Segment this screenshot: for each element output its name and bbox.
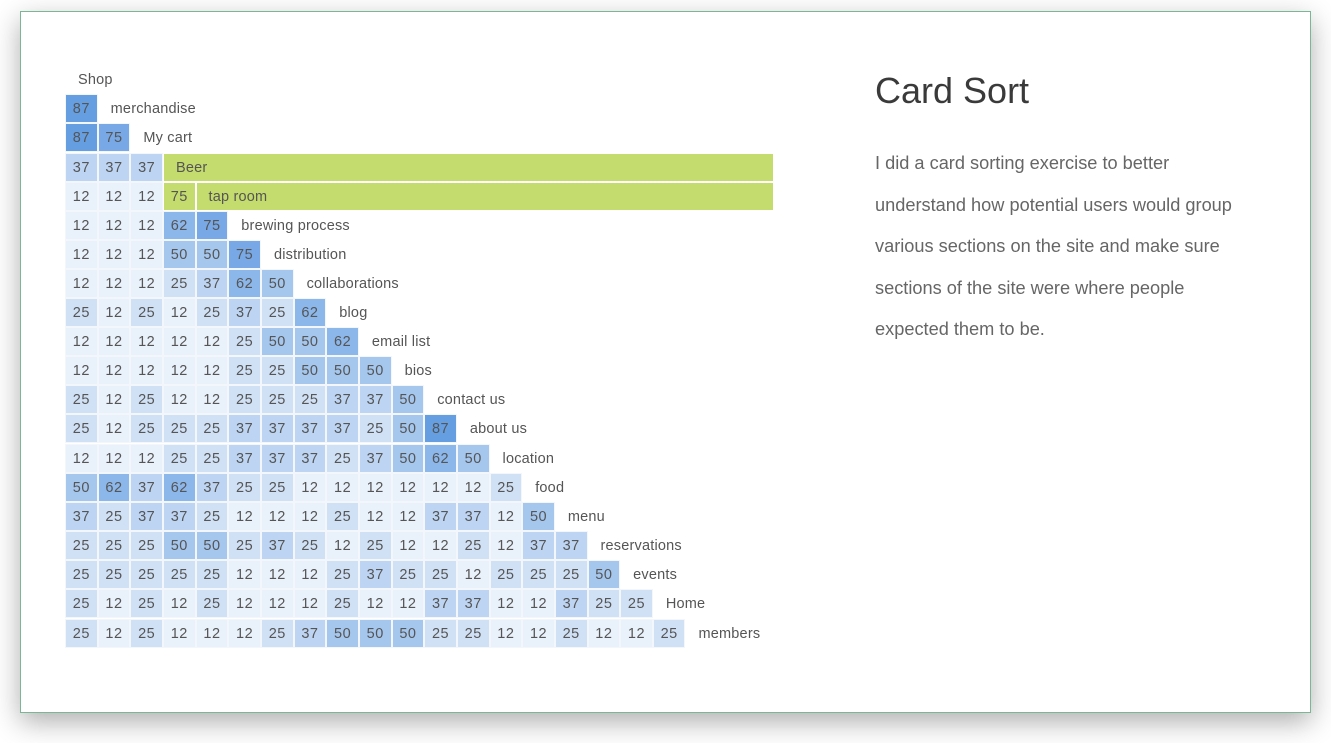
row: about us: 37 — [334, 421, 351, 437]
row: members: 12 — [105, 626, 123, 642]
row: reservations: 25 — [236, 538, 253, 554]
row: events: 12 — [301, 567, 318, 583]
row: members: 12 — [497, 626, 514, 642]
row: reservations: 12 — [497, 538, 514, 554]
row: menu: 12 — [236, 509, 253, 525]
row: contact us: contact us — [437, 392, 505, 408]
row: events: 25 — [203, 567, 221, 583]
row: reservations: 50 — [203, 538, 221, 554]
row: email list: 12 — [138, 334, 155, 350]
row: food: 12 — [301, 480, 318, 496]
row: blog: blog — [339, 305, 367, 321]
row: blog: 25 — [203, 305, 221, 321]
row: food: 25 — [236, 480, 253, 496]
row: reservations: 37 — [269, 538, 286, 554]
row: menu: 37 — [432, 509, 449, 525]
row: reservations: 25 — [367, 538, 384, 554]
row: contact us: 25 — [138, 392, 155, 408]
row: menu: 25 — [334, 509, 351, 525]
row: about us: 25 — [203, 421, 221, 437]
row: distribution: distribution — [274, 247, 346, 263]
row: contact us: 37 — [367, 392, 384, 408]
row: menu: 37 — [465, 509, 482, 525]
row: menu: 25 — [105, 509, 123, 525]
row: food: 12 — [465, 480, 482, 496]
row: reservations: 37 — [563, 538, 580, 554]
row: Home: 37 — [465, 596, 482, 612]
row: location — [65, 444, 554, 473]
row: events: 12 — [236, 567, 253, 583]
row: collaborations: 12 — [73, 276, 90, 292]
row: events: 50 — [595, 567, 612, 583]
row: members: 50 — [367, 626, 384, 642]
row: reservations: 25 — [105, 538, 123, 554]
row: events: 25 — [432, 567, 449, 583]
row: Home: 25 — [203, 596, 221, 612]
row: about us: 25 — [138, 421, 155, 437]
row: contact us: 12 — [203, 392, 221, 408]
row: members: 12 — [628, 626, 645, 642]
row: Home: 37 — [432, 596, 449, 612]
row: bios: 12 — [73, 363, 90, 379]
row: bios: 50 — [367, 363, 384, 379]
row: tap room: 75 — [171, 188, 188, 204]
row: members: 25 — [661, 626, 678, 642]
row: events: 25 — [497, 567, 514, 583]
chart: card sort similarity matrix: tap room — [208, 188, 267, 204]
row: location: 37 — [236, 451, 253, 467]
row: bios: bios — [405, 363, 432, 379]
row: about us: 25 — [171, 421, 188, 437]
row: email list: 62 — [334, 334, 351, 350]
row: contact us: 25 — [301, 392, 318, 408]
row: food: 37 — [203, 480, 221, 496]
row: about us: 37 — [269, 421, 286, 437]
row: brewing process: 12 — [105, 218, 123, 234]
row: members: 25 — [465, 626, 482, 642]
row: Home: 12 — [236, 596, 253, 612]
row: collaborations: collaborations — [307, 276, 399, 292]
row: bios — [65, 356, 432, 385]
row: merchandise: 87 — [73, 101, 90, 117]
row: members: 25 — [73, 626, 90, 642]
row: collaborations — [65, 269, 399, 298]
row: events — [65, 560, 677, 589]
row: location: 25 — [203, 451, 221, 467]
row: blog — [65, 298, 367, 327]
row: events: 25 — [138, 567, 155, 583]
row: reservations: 12 — [399, 538, 416, 554]
row: members: members — [698, 626, 760, 642]
row: distribution: 12 — [73, 247, 90, 263]
row: email list: 50 — [301, 334, 318, 350]
row: menu: 50 — [530, 509, 547, 525]
row: location: 50 — [465, 451, 482, 467]
row: bios: 25 — [269, 363, 286, 379]
row: events: 25 — [334, 567, 351, 583]
chart: card sort similarity matrix: Beer — [176, 160, 207, 176]
row: contact us: 25 — [73, 392, 90, 408]
row: blog: 37 — [236, 305, 253, 321]
row: reservations: 12 — [432, 538, 449, 554]
row: about us: 87 — [432, 421, 449, 437]
row: location: 25 — [334, 451, 351, 467]
row: reservations: 37 — [530, 538, 547, 554]
row: bios: 12 — [138, 363, 155, 379]
row: events: 25 — [105, 567, 123, 583]
text block: description: various sections on the site and make sure — [875, 236, 1220, 256]
row: email list: 25 — [236, 334, 253, 350]
row: menu: 37 — [138, 509, 155, 525]
row: collaborations: 37 — [203, 276, 221, 292]
label: Shop: Shop — [78, 72, 113, 88]
row: reservations: reservations — [600, 538, 682, 554]
row: bios: 12 — [203, 363, 221, 379]
row: members: 37 — [301, 626, 318, 642]
row: food — [65, 473, 564, 502]
row: My cart: 75 — [105, 130, 123, 146]
row: brewing process: brewing process — [241, 218, 350, 234]
row: location: 37 — [269, 451, 286, 467]
row: events: 25 — [530, 567, 547, 583]
row: Home: 12 — [301, 596, 318, 612]
row: merchandise — [65, 94, 196, 123]
row: blog: 62 — [301, 305, 318, 321]
text block: description: understand how potential users would group — [875, 194, 1232, 214]
row: collaborations: 62 — [236, 276, 253, 292]
row: contact us: 37 — [334, 392, 351, 408]
row: events: 25 — [171, 567, 188, 583]
row: Beer — [65, 153, 773, 182]
row: Beer: 37 — [73, 160, 90, 176]
row: food: 12 — [432, 480, 449, 496]
row: location: location — [503, 451, 554, 467]
row: email list: 12 — [171, 334, 188, 350]
row: reservations — [65, 531, 682, 560]
row: food: food — [535, 480, 564, 496]
row: Home: 12 — [269, 596, 286, 612]
row: distribution: 12 — [138, 247, 155, 263]
row: about us: 25 — [367, 421, 384, 437]
row: brewing process: 75 — [203, 218, 221, 234]
row: menu: 12 — [367, 509, 384, 525]
row: email list: 12 — [73, 334, 90, 350]
row: Home: 12 — [399, 596, 416, 612]
row: distribution: 50 — [203, 247, 221, 263]
row: about us: 50 — [399, 421, 416, 437]
row: reservations: 25 — [73, 538, 90, 554]
row: location: 12 — [73, 451, 90, 467]
row: Home: 12 — [105, 596, 123, 612]
row: food: 50 — [73, 480, 90, 496]
row: collaborations: 50 — [269, 276, 286, 292]
row: distribution: 50 — [171, 247, 188, 263]
row: members: 25 — [138, 626, 155, 642]
text block: description: expected them to be. — [875, 319, 1045, 339]
row: distribution: 75 — [236, 247, 253, 263]
row: blog: 12 — [105, 305, 123, 321]
row: Home: 12 — [171, 596, 188, 612]
row: members: 12 — [530, 626, 547, 642]
row: blog: 25 — [73, 305, 90, 321]
row: reservations: 25 — [465, 538, 482, 554]
row: blog: 12 — [171, 305, 188, 321]
row: food: 12 — [367, 480, 384, 496]
row: blog: 25 — [269, 305, 286, 321]
row: Home: 37 — [563, 596, 580, 612]
row: bios: 12 — [105, 363, 123, 379]
row: distribution: 12 — [105, 247, 123, 263]
row: food: 12 — [399, 480, 416, 496]
row: Home: 25 — [628, 596, 645, 612]
row: menu: menu — [568, 509, 605, 525]
row: Home: 25 — [595, 596, 612, 612]
row: Beer: 37 — [138, 160, 155, 176]
row: menu: 37 — [171, 509, 188, 525]
row: members: 50 — [334, 626, 351, 642]
row: Beer: 37 — [105, 160, 123, 176]
row: food: 12 — [334, 480, 351, 496]
text block: description — [875, 153, 1232, 339]
row: events: 25 — [563, 567, 580, 583]
row: bios: 50 — [301, 363, 318, 379]
row: members: 12 — [236, 626, 253, 642]
row: about us — [65, 414, 527, 443]
row: blog: 25 — [138, 305, 155, 321]
row: events: 25 — [399, 567, 416, 583]
row: events: 12 — [465, 567, 482, 583]
row: menu: 12 — [399, 509, 416, 525]
row: members: 25 — [269, 626, 286, 642]
row: events: 25 — [73, 567, 90, 583]
row: members: 25 — [563, 626, 580, 642]
text block: description: I did a card sorting exercise to better — [875, 153, 1169, 173]
row: members: 50 — [399, 626, 416, 642]
row: Home: 25 — [138, 596, 155, 612]
row: location: 62 — [432, 451, 449, 467]
text block: description: sections of the site were where people — [875, 278, 1184, 298]
row: bios: 50 — [334, 363, 351, 379]
row: Home: 12 — [367, 596, 384, 612]
row: location: 37 — [301, 451, 318, 467]
row: food: 37 — [138, 480, 155, 496]
row: tap room: 12 — [105, 188, 123, 204]
row: about us: 12 — [105, 421, 123, 437]
row: location: 37 — [367, 451, 384, 467]
row: contact us: 25 — [269, 392, 286, 408]
row: distribution — [65, 240, 346, 269]
row: menu: 12 — [269, 509, 286, 525]
row: brewing process — [65, 211, 350, 240]
row: members: 25 — [432, 626, 449, 642]
row: Home: 25 — [73, 596, 90, 612]
row: Home: 12 — [497, 596, 514, 612]
row: location: 12 — [138, 451, 155, 467]
row: merchandise: merchandise — [111, 101, 196, 117]
row: location: 25 — [171, 451, 188, 467]
row: Home: Home — [666, 596, 705, 612]
row: contact us: 25 — [236, 392, 253, 408]
row: email list: 12 — [203, 334, 221, 350]
row: contact us: 50 — [399, 392, 416, 408]
row: food: 62 — [105, 480, 123, 496]
row: tap room — [65, 182, 773, 211]
row: about us: 37 — [236, 421, 253, 437]
row: about us: 37 — [301, 421, 318, 437]
row: My cart: My cart — [143, 130, 192, 146]
row: menu — [65, 502, 605, 531]
row: food: 25 — [269, 480, 286, 496]
row: events: 37 — [367, 567, 384, 583]
row: bios: 12 — [171, 363, 188, 379]
row: menu: 12 — [497, 509, 514, 525]
row: email list — [65, 327, 430, 356]
row: brewing process: 12 — [138, 218, 155, 234]
row: contact us — [65, 385, 505, 414]
row: menu: 12 — [301, 509, 318, 525]
row: members: 12 — [203, 626, 221, 642]
row: collaborations: 25 — [171, 276, 188, 292]
row: collaborations: 12 — [105, 276, 123, 292]
row: menu: 37 — [73, 509, 90, 525]
row: email list: 12 — [105, 334, 123, 350]
row: location: 50 — [399, 451, 416, 467]
row: location: 12 — [105, 451, 123, 467]
row: tap room: 12 — [73, 188, 90, 204]
row: menu: 25 — [203, 509, 221, 525]
row: Home — [65, 589, 705, 618]
row: events: 12 — [269, 567, 286, 583]
row: reservations: 25 — [138, 538, 155, 554]
row: Home: 25 — [334, 596, 351, 612]
row: email list: 50 — [269, 334, 286, 350]
row: food: 62 — [171, 480, 188, 496]
row: email list: email list — [372, 334, 430, 350]
row: My cart: 87 — [73, 130, 90, 146]
row: brewing process: 62 — [171, 218, 188, 234]
row: events: events — [633, 567, 677, 583]
row: about us: about us — [470, 421, 527, 437]
row: Home: 12 — [530, 596, 547, 612]
row: reservations: 25 — [301, 538, 318, 554]
row: contact us: 12 — [171, 392, 188, 408]
row: members: 12 — [595, 626, 612, 642]
row: brewing process: 12 — [73, 218, 90, 234]
row: reservations: 12 — [334, 538, 351, 554]
chart: card sort similarity matrix — [65, 72, 773, 648]
row: members — [65, 619, 760, 648]
row: reservations: 50 — [171, 538, 188, 554]
row: collaborations: 12 — [138, 276, 155, 292]
row: tap room: 12 — [138, 188, 155, 204]
row: members: 12 — [171, 626, 188, 642]
row: about us: 25 — [73, 421, 90, 437]
row: My cart — [65, 123, 192, 152]
row: food: 25 — [497, 480, 514, 496]
row: contact us: 12 — [105, 392, 123, 408]
row: bios: 25 — [236, 363, 253, 379]
title: Card Sort — [875, 70, 1029, 111]
